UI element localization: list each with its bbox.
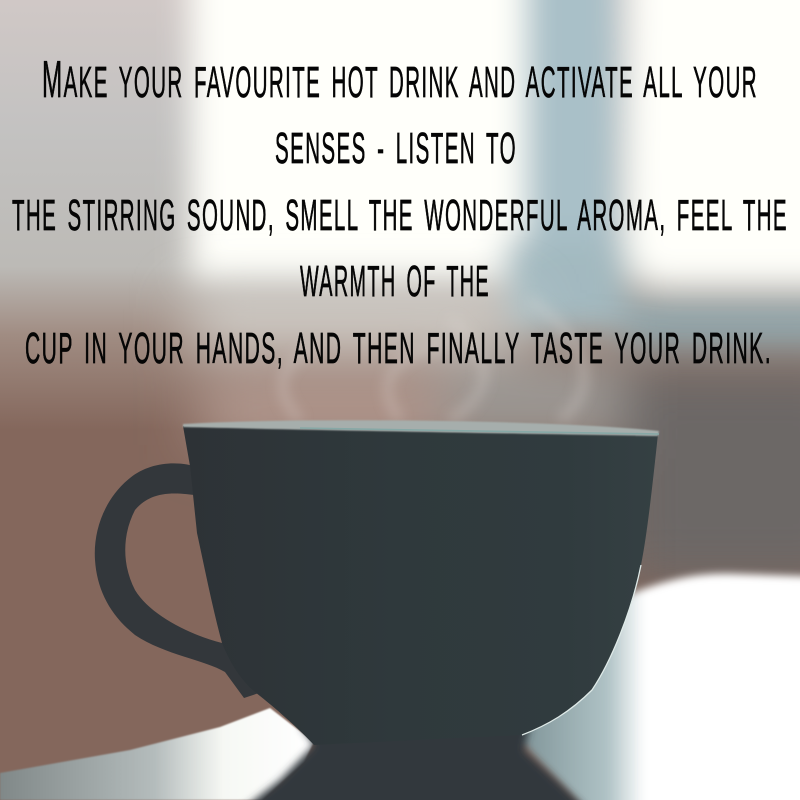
coffee cup — [95, 420, 659, 745]
cup handle — [95, 463, 262, 698]
cup body — [183, 426, 658, 745]
cup rim — [183, 420, 659, 436]
table surface: right highlight — [480, 574, 800, 800]
cup right edge highlight — [522, 565, 641, 735]
caption text: SENSES - LISTEN TO — [275, 124, 517, 173]
cup shadow on table — [235, 725, 592, 800]
caption text: WARMTH OF THE — [300, 257, 490, 306]
rim teal line — [300, 428, 659, 434]
caption text — [12, 51, 788, 373]
table surface: left highlight — [0, 708, 314, 800]
steam — [283, 300, 584, 420]
